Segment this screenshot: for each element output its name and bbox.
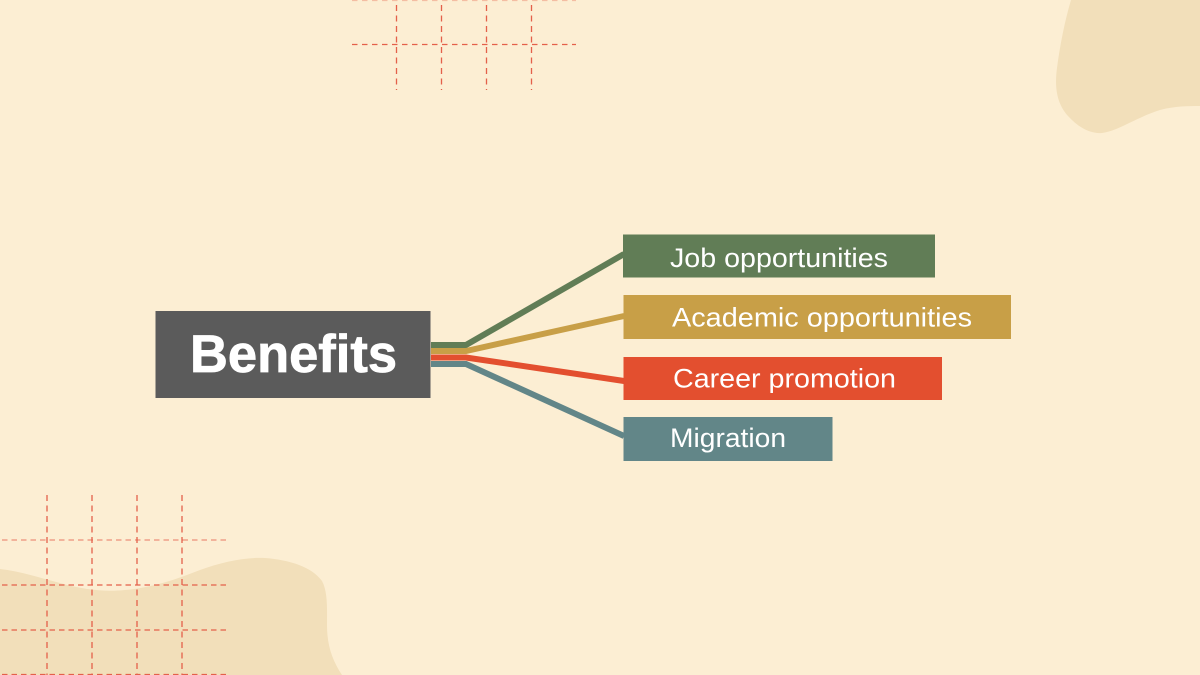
box: Job opportunities	[623, 234, 935, 278]
grid: top dashed	[352, 0, 576, 90]
central box: Benefits	[156, 311, 430, 398]
box: Migration: Migration	[670, 423, 786, 453]
box: Job opportunities: Job opportunities	[670, 243, 888, 273]
box: Academic opportunities: Academic opportunities	[672, 302, 972, 332]
box: Migration	[624, 417, 832, 461]
blob: top right	[1056, 0, 1200, 133]
blob: bottom left	[0, 558, 342, 675]
central box: Benefits: Benefits	[190, 325, 397, 384]
box: Career promotion: Career promotion	[673, 364, 896, 394]
box: Academic opportunities	[624, 295, 1011, 339]
grid: bottom left dashed	[2, 495, 227, 675]
connector: career promotion	[431, 358, 624, 381]
connector: academic opportunities	[431, 316, 624, 351]
connector: migration	[431, 364, 624, 436]
box: Career promotion	[624, 357, 942, 400]
connector: job opportunities	[431, 254, 624, 345]
